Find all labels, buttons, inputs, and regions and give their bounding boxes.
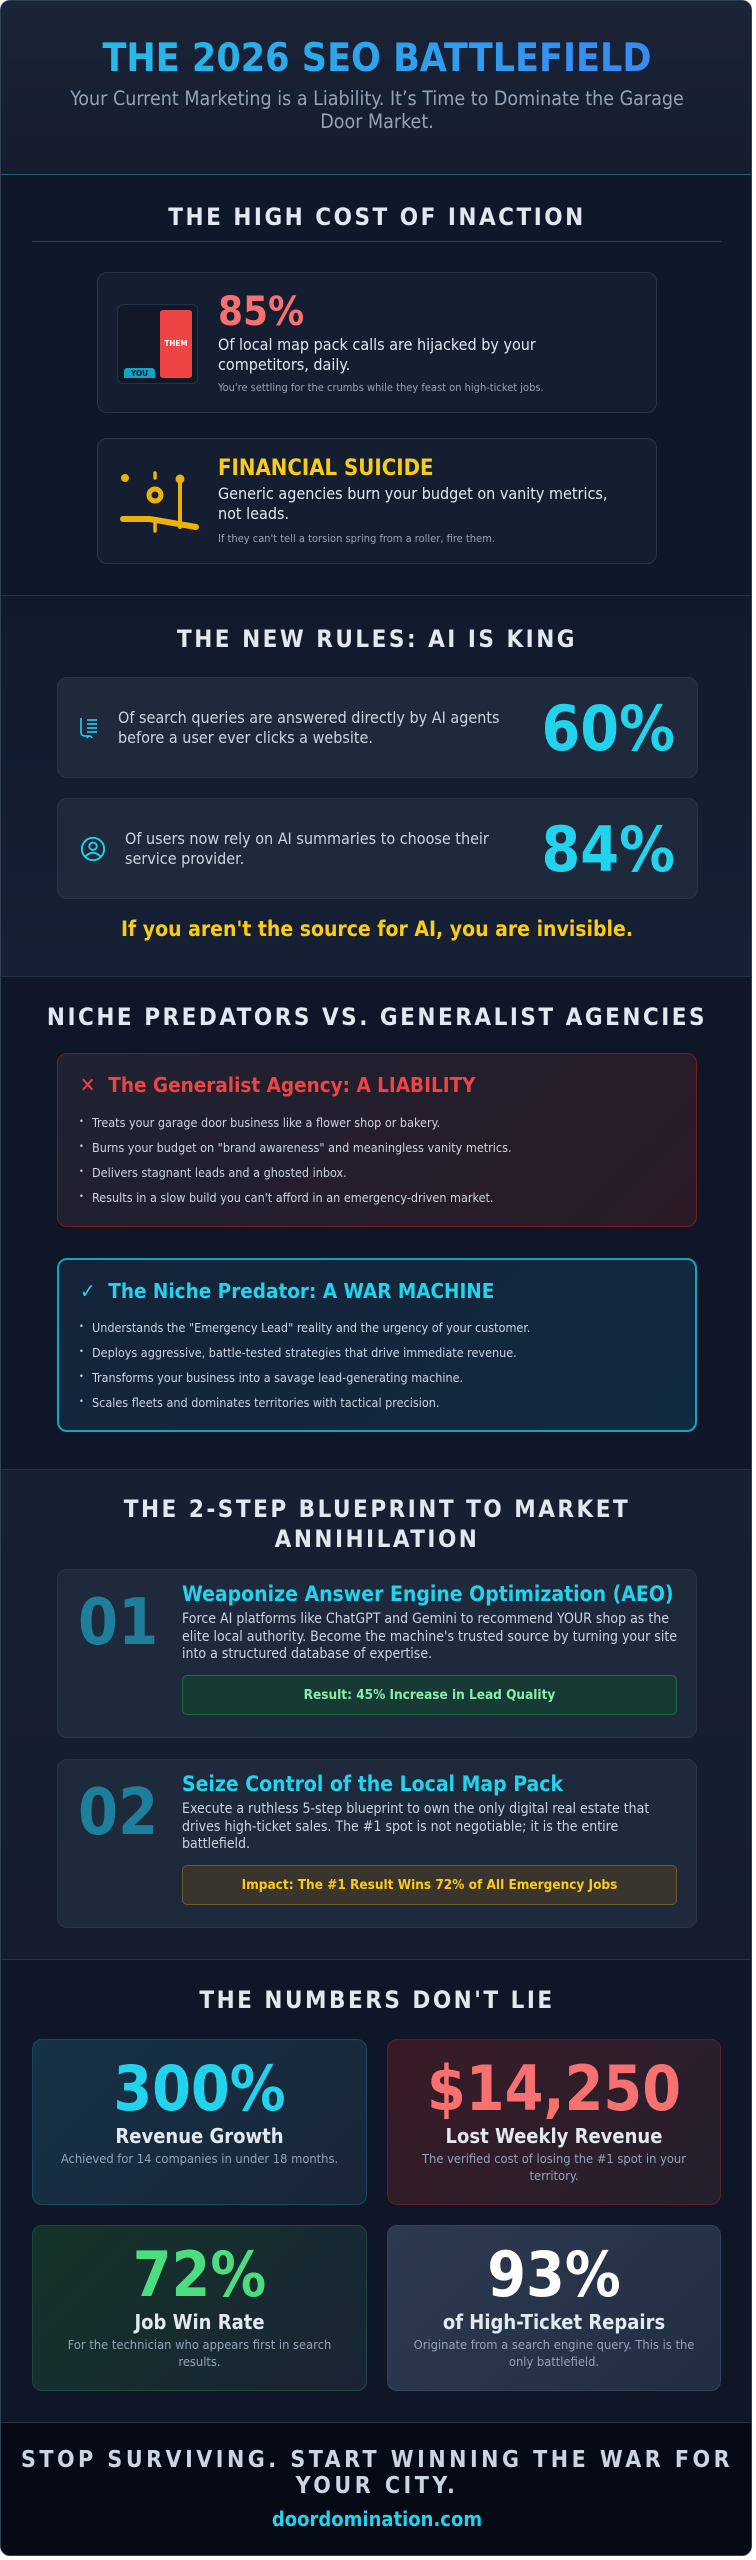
list: Results in a slow build you can't afford in an emergency-driven market. (92, 1190, 493, 1205)
stat card: 72%: 72% (133, 2238, 266, 2311)
stat card: 72%: For the technician who appears first in search (68, 2338, 331, 2353)
icon: document (80, 718, 97, 738)
step 01 (57, 1569, 697, 1738)
text: Force AI platforms like ChatGPT and Gemini to recommend YOUR shop as the (182, 1611, 669, 1627)
heading: ✓ The Niche Predator: A WAR MACHINE (80, 1279, 494, 1303)
footer (1, 2422, 753, 2557)
heading: THE NUMBERS DON'T LIE (199, 1986, 555, 2014)
text: If they can't tell a torsion spring from a roller, fire them. (218, 532, 495, 545)
panel: niche predator (57, 1258, 697, 1432)
stat card: 72%: results. (178, 2355, 221, 2370)
footer headline: STOP SURVIVING. START WINNING THE WAR FOR (21, 2447, 733, 2473)
impact callout: Impact: The #1 Result Wins 72% of All Emergency Jobs (242, 1876, 617, 1892)
icon: user (80, 836, 106, 862)
text (182, 1582, 677, 1715)
text (125, 829, 489, 868)
list: Burns your budget on "brand awareness" and meaningless vanity metrics. (92, 1140, 512, 1155)
section: high cost of inaction (1, 176, 753, 595)
card: 85% (97, 272, 657, 413)
stat: 60% (541, 692, 675, 765)
stat card: 300%: 300% (113, 2052, 286, 2125)
text: battlefield. (182, 1836, 250, 1852)
heading: THE 2-STEP BLUEPRINT TO MARKET (124, 1495, 630, 1523)
stat card: 93%: Originate from a search engine query. This is the (414, 2338, 694, 2353)
text: Generic agencies burn your budget on vanity metrics, (218, 484, 607, 503)
text: Weaponize Answer Engine Optimization (AEO) (182, 1582, 674, 1606)
footer headline: YOUR CITY. (296, 2473, 458, 2499)
icon: scale (120, 471, 199, 533)
stat card: 93%: of High-Ticket Repairs (443, 2310, 665, 2334)
title (1, 35, 753, 83)
result callout: Result: 45% Increase in Lead Quality (304, 1686, 555, 1702)
card: financial suicide (97, 438, 657, 564)
stat card: 93%: only battlefield. (509, 2355, 599, 2370)
stat text: competitors, daily. (218, 355, 350, 374)
result callout (182, 1674, 677, 1714)
text: FINANCIAL SUICIDE (218, 456, 434, 481)
text (182, 1772, 677, 1905)
stat card: $14,250 (387, 2039, 721, 2205)
stat card: 300%: Achieved for 14 companies in under 18 months. (61, 2152, 338, 2167)
stat card: 72% (32, 2225, 367, 2391)
text (218, 456, 607, 545)
text: Execute a ruthless 5-step blueprint to own the only digital real estate that (182, 1801, 649, 1817)
heading: NICHE PREDATORS VS. GENERALIST AGENCIES (47, 1003, 707, 1031)
section: blueprint (1, 1469, 753, 1959)
number: 01 (78, 1586, 158, 1660)
text: service provider. (125, 849, 244, 868)
list: Delivers stagnant leads and a ghosted inbox. (92, 1165, 347, 1180)
text: drives high-ticket sales. The #1 spot is not negotiable; it is the entire (182, 1818, 618, 1834)
heading: ✕ The Generalist Agency: A LIABILITY (80, 1073, 476, 1097)
stat: 84% (541, 813, 675, 886)
stat card: $14,250: territory. (530, 2169, 578, 2184)
stat card: 93%: 93% (487, 2238, 621, 2311)
stat card: $14,250: The verified cost of losing the #1 spot in your (422, 2152, 686, 2167)
list (80, 1320, 530, 1410)
list: Treats your garage door business like a flower shop or bakery. (92, 1115, 440, 1130)
text: before a user ever clicks a website. (118, 728, 373, 747)
stat text: Of local map pack calls are hijacked by your (218, 335, 536, 354)
header (1, 1, 753, 175)
list: Transforms your business into a savage lead-generating machine. (92, 1370, 463, 1385)
section: numbers (1, 1959, 753, 2422)
list: Deploys aggressive, battle-tested strategies that drive immediate revenue. (92, 1345, 517, 1360)
number: 02 (78, 1776, 158, 1850)
card: 60% (57, 677, 698, 778)
text: not leads. (218, 504, 289, 523)
stat text: You're settling for the crumbs while they feast on high-ticket jobs. (218, 381, 544, 394)
heading (124, 1495, 630, 1553)
text (118, 708, 499, 747)
icon: bar chart you vs them (117, 304, 198, 384)
heading: ANNIHILATION (275, 1525, 479, 1553)
stat card: $14,250: Lost Weekly Revenue (446, 2124, 662, 2148)
list: Scales fleets and dominates territories with tactical precision. (92, 1395, 439, 1410)
stat card: 93% (387, 2225, 721, 2391)
footer url: doordomination.com (272, 2507, 482, 2531)
panel: generalist (57, 1053, 697, 1227)
stat card: 300% (32, 2039, 367, 2205)
heading: THE NEW RULES: AI IS KING (177, 625, 577, 653)
stat card: $14,250: $14,250 (427, 2052, 681, 2125)
callout: If you aren't the source for AI, you are invisible. (121, 917, 633, 941)
footer headline (21, 2447, 733, 2499)
text: into a structured database of expertise. (182, 1646, 432, 1662)
stat text: 85% (218, 289, 304, 335)
card: 84% (57, 798, 698, 899)
stat card: 72%: Job Win Rate (134, 2310, 265, 2334)
section: AI is king (1, 595, 753, 976)
step 02 (57, 1759, 697, 1928)
section: niche predators (1, 976, 753, 1469)
heading: THE HIGH COST OF INACTION (168, 203, 586, 231)
list: Understands the "Emergency Lead" reality and the urgency of your customer. (92, 1320, 530, 1335)
icon: bar chart you vs them: YOU (131, 369, 148, 378)
text: Of search queries are answered directly by AI agents (118, 708, 499, 727)
text: elite local authority. Become the machine's trusted source by turning your site (182, 1628, 677, 1644)
stat text (218, 289, 544, 394)
text: Of users now rely on AI summaries to choose their (125, 829, 489, 848)
stat card: 300%: Revenue Growth (115, 2124, 284, 2148)
title: THE 2026 SEO BATTLEFIELD (102, 36, 652, 81)
subtitle: Door Market. (320, 110, 434, 133)
list (80, 1115, 512, 1205)
icon: bar chart you vs them: THEM (164, 339, 188, 348)
subtitle (70, 87, 684, 133)
impact callout (182, 1864, 677, 1904)
text: Seize Control of the Local Map Pack (182, 1772, 563, 1796)
subtitle: Your Current Marketing is a Liability. It’s Time to Dominate the Garage (70, 87, 684, 110)
